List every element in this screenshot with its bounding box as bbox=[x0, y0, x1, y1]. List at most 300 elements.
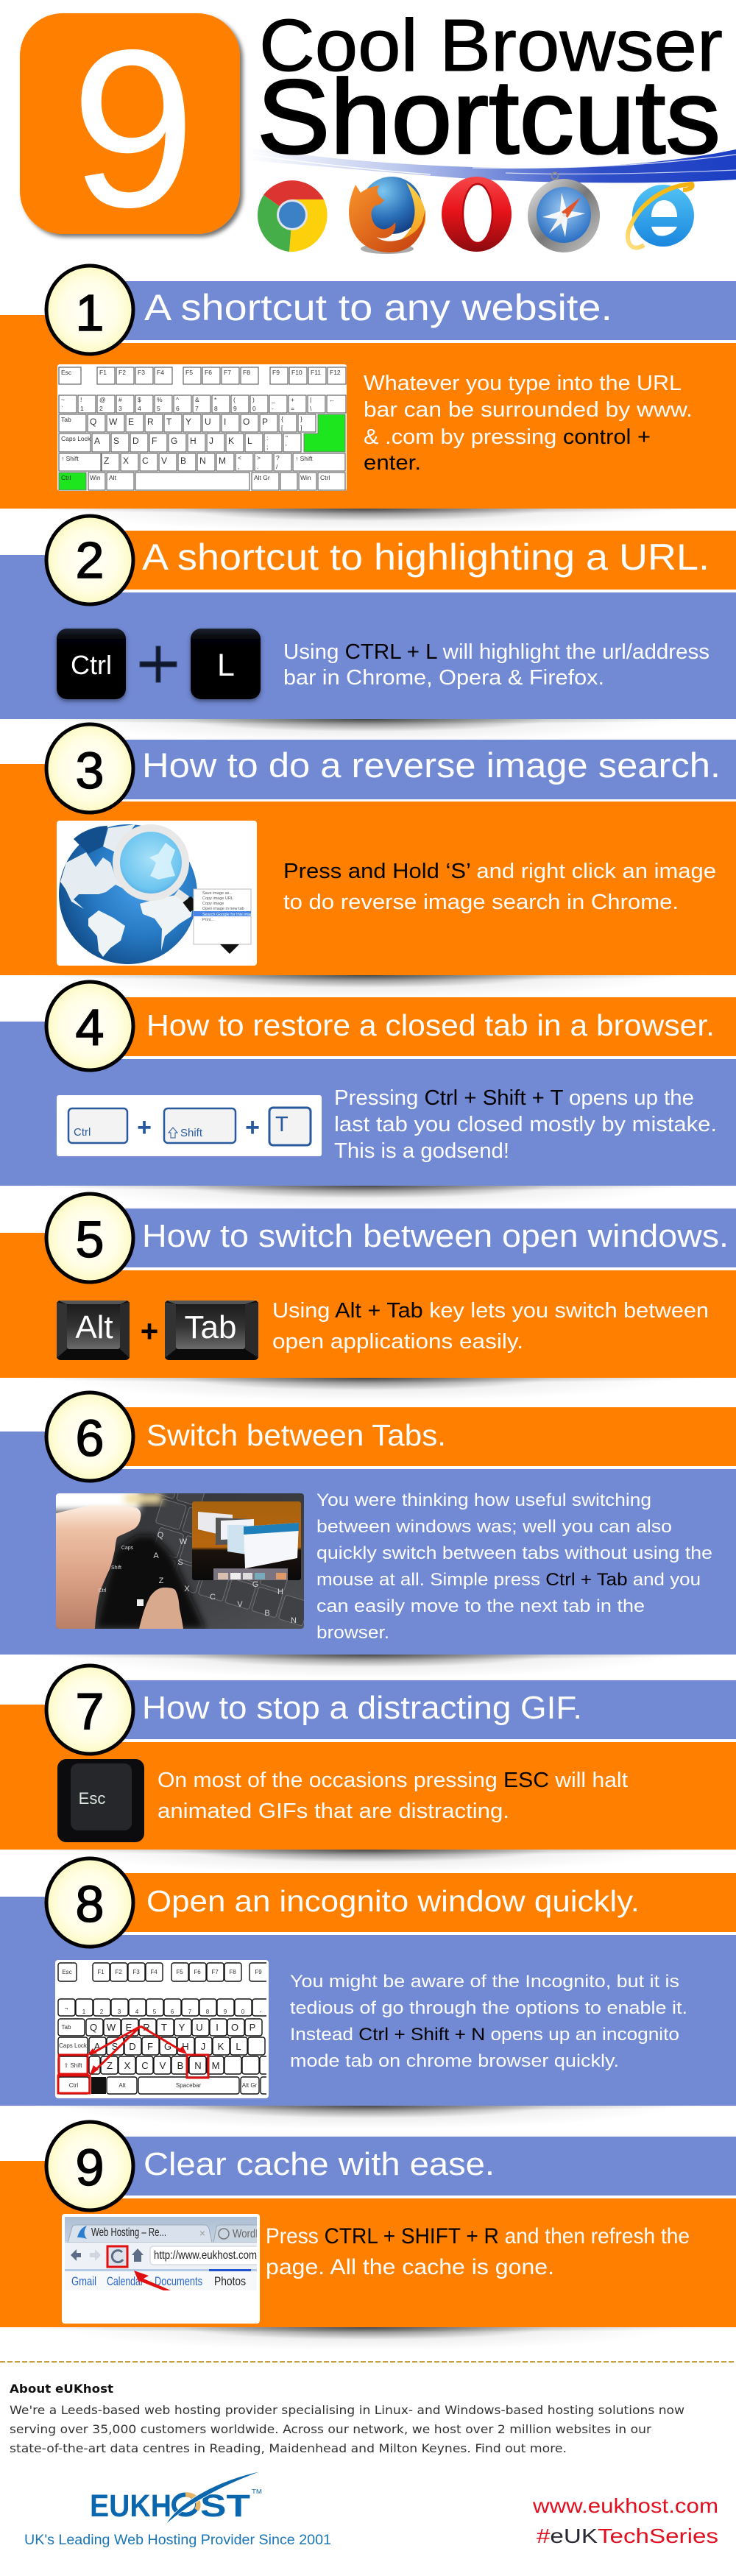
keyboard with red arrows to ctrl shift N: Esc bbox=[62, 1969, 72, 1975]
number badge 5 bbox=[46, 1194, 133, 1282]
keyboard with ctrl and enter highlighted: ← bbox=[329, 396, 336, 403]
keyboard with ctrl and enter highlighted: B bbox=[180, 456, 186, 466]
body text 5: open applications easily. bbox=[272, 1330, 523, 1354]
keyboard with red arrows to ctrl shift N: F8 bbox=[229, 1969, 236, 1975]
keyboard with red arrows to ctrl shift N: V bbox=[160, 2060, 166, 2071]
keyboard with ctrl and enter highlighted: 0 bbox=[252, 405, 256, 412]
photo: hand on keyboard with window switcher: N bbox=[291, 1616, 297, 1625]
body text 1: Whatever you type into the URL bbox=[364, 372, 682, 395]
keys: ctrl + L bbox=[57, 629, 261, 699]
number badge 4: 4 bbox=[76, 999, 104, 1056]
about heading: About eUKhost bbox=[10, 2382, 113, 2396]
keyboard with ctrl and enter highlighted: V bbox=[161, 456, 167, 466]
keyboard with ctrl and enter highlighted: " bbox=[286, 434, 288, 442]
keyboard with ctrl and enter highlighted: * bbox=[214, 396, 217, 403]
body text 6: between windows was; well you can also bbox=[316, 1517, 672, 1537]
body text 6 bbox=[316, 1490, 712, 1643]
photo: hand on keyboard with window switcher: W bbox=[180, 1538, 188, 1546]
keyboard with ctrl and enter highlighted: ] bbox=[300, 424, 302, 431]
shadow under panel 6 bbox=[22, 1631, 714, 1678]
keyboard with ctrl and enter highlighted: Ctrl bbox=[320, 474, 330, 481]
eUKhost logo: ST bbox=[200, 2488, 250, 2524]
keyboard with red arrows to ctrl shift N: Ctrl bbox=[69, 2082, 78, 2089]
number badge 5: 5 bbox=[76, 1211, 104, 1268]
keyboard with ctrl and enter highlighted: ↑ Shift bbox=[61, 455, 79, 462]
keyboard with ctrl and enter highlighted: 1 bbox=[80, 405, 84, 412]
keyboard with ctrl and enter highlighted: F10 bbox=[291, 369, 302, 376]
keyboard with ctrl and enter highlighted: S bbox=[113, 436, 119, 446]
shadow under panel 3 bbox=[22, 952, 714, 999]
number badge 7 bbox=[46, 1666, 133, 1754]
eUKhost logo: EUKH bbox=[90, 2488, 171, 2524]
keyboard with ctrl and enter highlighted: 8 bbox=[214, 405, 218, 412]
about paragraph bbox=[10, 2403, 684, 2455]
keyboard with ctrl and enter highlighted: % bbox=[157, 396, 163, 403]
keyboard with ctrl and enter highlighted: 6 bbox=[176, 405, 180, 412]
panel: shortcut 3 bbox=[0, 724, 736, 975]
keyboard with red arrows to ctrl shift N: Z bbox=[107, 2060, 113, 2071]
about paragraph: serving over 35,000 customers worldwide. Across our network, we host over 2 million websites in our bbox=[10, 2422, 651, 2436]
body text 6: You were thinking how useful switching bbox=[316, 1490, 651, 1510]
keyboard with ctrl and enter highlighted: Caps Lock bbox=[61, 435, 91, 442]
body text 8: Instead Ctrl + Shift + N opens up an incognito bbox=[290, 2025, 679, 2045]
keyboard with ctrl and enter highlighted: F6 bbox=[205, 369, 212, 376]
keyboard with red arrows to ctrl shift N: ⇧ Shift bbox=[64, 2062, 82, 2069]
panel: shortcut 4 bbox=[0, 982, 736, 1186]
website and hashtag: #eUK TechSeries bbox=[537, 2524, 718, 2547]
body text 6: quickly switch between tabs without using the bbox=[316, 1543, 712, 1563]
keyboard with ctrl and enter highlighted: ; bbox=[266, 443, 268, 450]
number badge 3 bbox=[46, 724, 133, 813]
keyboard with ctrl and enter highlighted: Alt Gr bbox=[254, 474, 270, 481]
photo: hand on keyboard with window switcher: Ctrl bbox=[99, 1588, 107, 1593]
keyboard with ctrl and enter highlighted: F9 bbox=[272, 369, 280, 376]
keyboard with red arrows to ctrl shift N: 3 bbox=[118, 2009, 121, 2015]
keyboard with ctrl and enter highlighted: { bbox=[281, 415, 283, 422]
keyboard with red arrows to ctrl shift N: Alt Gr bbox=[242, 2082, 258, 2089]
number badge 6: 6 bbox=[76, 1409, 104, 1467]
body text 8: tedious of go through the options to enable it. bbox=[290, 1998, 687, 2018]
photo: hand on keyboard with window switcher bbox=[56, 1493, 304, 1629]
body text 1: enter. bbox=[364, 451, 421, 475]
keyboard with ctrl and enter highlighted: ? bbox=[276, 454, 280, 461]
keyboard with ctrl and enter highlighted: 7 bbox=[195, 405, 199, 412]
keyboard with red arrows to ctrl shift N: 2 bbox=[100, 2009, 104, 2015]
keyboard with ctrl and enter highlighted: H bbox=[190, 436, 197, 446]
keyboard with ctrl and enter highlighted: \ bbox=[310, 405, 312, 412]
body text 8: mode tab on chrome browser quickly. bbox=[290, 2051, 619, 2071]
body text 7: On most of the occasions pressing ESC will halt bbox=[158, 1769, 628, 1792]
picture: globe, magnifier and context menu: Open image in new tab bbox=[202, 907, 244, 911]
header badge: big 9 bbox=[20, 3, 240, 254]
panel: shortcut 6 bbox=[0, 1393, 736, 1655]
keyboard with ctrl and enter highlighted: E bbox=[128, 417, 134, 427]
keyboard with ctrl and enter highlighted: Z bbox=[104, 456, 109, 466]
keyboard with red arrows to ctrl shift N: 6 bbox=[171, 2009, 174, 2015]
heading 7: How to stop a distracting GIF. bbox=[142, 1690, 582, 1726]
decorative blue swoosh bbox=[247, 147, 736, 183]
keyboard with ctrl and enter highlighted: ) bbox=[252, 396, 255, 403]
picture: globe, magnifier and context menu: Copy image bbox=[202, 902, 224, 906]
keyboard with ctrl and enter highlighted: Win bbox=[90, 474, 101, 481]
keyboard with ctrl and enter highlighted: F8 bbox=[243, 369, 250, 376]
keyboard with ctrl and enter highlighted: F bbox=[152, 436, 157, 446]
keyboard with red arrows to ctrl shift N: F4 bbox=[150, 1969, 158, 1975]
keyboard with ctrl and enter highlighted: L bbox=[247, 436, 252, 446]
keyboard with ctrl and enter highlighted: Win bbox=[300, 474, 311, 481]
photo: hand on keyboard with window switcher: Caps bbox=[121, 1546, 134, 1551]
screenshot: browser reload button: http://www.eukhost.com bbox=[154, 2249, 257, 2262]
keyboard with red arrows to ctrl shift N: 7 bbox=[188, 2009, 192, 2015]
eUKhost logo bbox=[90, 2471, 263, 2524]
keyboard with ctrl and enter highlighted: F5 bbox=[185, 369, 193, 376]
photo: hand on keyboard with window switcher: X bbox=[184, 1585, 190, 1593]
keyboard with ctrl and enter highlighted: . bbox=[257, 463, 258, 470]
keyboard with red arrows to ctrl shift N: A bbox=[94, 2041, 101, 2052]
shadow under panel 2 bbox=[22, 696, 714, 743]
keys: alt + tab: + bbox=[141, 1314, 158, 1348]
body text 9: Press CTRL + SHIFT + R and then refresh the bbox=[266, 2224, 690, 2248]
screenshot: browser reload button: × bbox=[199, 2227, 205, 2239]
number badge 2 bbox=[46, 516, 133, 604]
keyboard with red arrows to ctrl shift N: 4 bbox=[135, 2009, 139, 2015]
keys: alt + tab: Alt bbox=[75, 1309, 113, 1345]
keyboard with ctrl and enter highlighted: ~ bbox=[61, 396, 65, 403]
photo: hand on keyboard with window switcher: Shift bbox=[111, 1565, 121, 1571]
keyboard with red arrows to ctrl shift N: X bbox=[124, 2060, 131, 2071]
keyboard with red arrows to ctrl shift N: 1 bbox=[82, 2009, 86, 2015]
keyboard with ctrl and enter highlighted: T bbox=[166, 417, 172, 427]
photo: hand on keyboard with window switcher: B bbox=[264, 1609, 270, 1618]
keyboard with ctrl and enter highlighted: A bbox=[94, 436, 100, 446]
keyboard with ctrl and enter highlighted: C bbox=[142, 456, 149, 466]
body text 4 bbox=[334, 1086, 717, 1163]
keyboard with red arrows to ctrl shift N: R bbox=[143, 2022, 150, 2033]
keyboard with ctrl and enter highlighted: W bbox=[109, 417, 118, 427]
keyboard with red arrows to ctrl shift N: B bbox=[177, 2060, 183, 2071]
keys: ctrl + shift + T: + bbox=[245, 1114, 260, 1142]
keyboard with ctrl and enter highlighted: O bbox=[243, 417, 250, 427]
body text 7: animated GIFs that are distracting. bbox=[158, 1800, 509, 1823]
photo: hand on keyboard with window switcher: V bbox=[237, 1600, 243, 1609]
keyboard with ctrl and enter highlighted: N bbox=[199, 456, 206, 466]
about paragraph: We're a Leeds-based web hosting provider specialising in Linux- and Windows-based hosting solutions now bbox=[10, 2403, 684, 2417]
keyboard with red arrows to ctrl shift N: - bbox=[260, 2009, 262, 2015]
keyboard with ctrl and enter highlighted: F4 bbox=[157, 369, 164, 376]
keyboard with red arrows to ctrl shift N: J bbox=[201, 2041, 205, 2052]
photo: hand on keyboard with window switcher: S bbox=[177, 1558, 183, 1567]
shadow under panel 4 bbox=[22, 1162, 714, 1209]
keyboard with red arrows to ctrl shift N: F9 bbox=[255, 1969, 262, 1975]
body text 1: bar can be surrounded by www. bbox=[364, 398, 693, 422]
title: Cool Browser bbox=[259, 4, 723, 87]
number badge 8: 8 bbox=[76, 1875, 104, 1933]
keyboard with red arrows to ctrl shift N: F2 bbox=[115, 1969, 122, 1975]
keyboard with ctrl and enter highlighted: Q bbox=[90, 417, 96, 427]
screenshot: browser reload button: Calendar bbox=[107, 2274, 144, 2288]
keyboard with ctrl and enter highlighted: J bbox=[209, 436, 213, 446]
shadow under panel 8 bbox=[22, 2082, 714, 2129]
body text 5 bbox=[272, 1299, 709, 1354]
keyboard with ctrl and enter highlighted: ( bbox=[233, 396, 236, 403]
keyboard with red arrows to ctrl shift N: ¬ bbox=[65, 2005, 68, 2011]
keyboard with red arrows to ctrl shift N: O bbox=[231, 2022, 238, 2033]
keyboard with red arrows to ctrl shift N: H bbox=[182, 2041, 189, 2052]
keyboard with red arrows to ctrl shift N: N bbox=[194, 2060, 202, 2071]
title bbox=[257, 4, 723, 176]
screenshot: browser reload button: Photos bbox=[214, 2274, 246, 2288]
keys: ctrl + L: Ctrl bbox=[71, 650, 112, 680]
panel: shortcut 7 bbox=[0, 1666, 736, 1850]
screenshot: browser reload button: Gmail bbox=[71, 2274, 96, 2288]
photo: hand on keyboard with window switcher: Z bbox=[159, 1577, 164, 1585]
photo: hand on keyboard with window switcher: H bbox=[277, 1588, 283, 1596]
keyboard with ctrl and enter highlighted: $ bbox=[138, 396, 141, 403]
shadow under panel 7 bbox=[22, 1826, 714, 1873]
keyboard with red arrows to ctrl shift N: Alt bbox=[118, 2082, 126, 2089]
keyboard with ctrl and enter highlighted: D bbox=[132, 436, 139, 446]
body text 4: last tab you closed mostly by mistake. bbox=[334, 1113, 717, 1136]
keyboard with red arrows to ctrl shift N: W bbox=[107, 2022, 116, 2033]
keyboard with red arrows to ctrl shift N: 0 bbox=[241, 2009, 245, 2015]
body text 6: can easily move to the next tab in the bbox=[316, 1596, 645, 1616]
body text 1 bbox=[364, 372, 693, 475]
keyboard with ctrl and enter highlighted: Alt bbox=[109, 474, 117, 481]
about paragraph: state-of-the-art data centres in Reading, Maidenhead and Milton Keynes. Find out more. bbox=[10, 2441, 567, 2455]
panel: shortcut 9 bbox=[0, 2122, 736, 2327]
heading 6: Switch between Tabs. bbox=[146, 1418, 446, 1452]
body text 8 bbox=[290, 1972, 687, 2071]
shadow under panel 5 bbox=[22, 1354, 714, 1401]
keyboard with ctrl and enter highlighted: F11 bbox=[311, 369, 321, 376]
heading 8: Open an incognito window quickly. bbox=[146, 1884, 640, 1918]
website and hashtag bbox=[532, 2494, 718, 2547]
keyboard with red arrows to ctrl shift N: U bbox=[196, 2022, 203, 2033]
keyboard with red arrows to ctrl shift N: D bbox=[129, 2041, 136, 2052]
eUKhost logo: TM bbox=[252, 2488, 262, 2495]
keyboard with ctrl and enter highlighted: U bbox=[205, 417, 211, 427]
body text 3: Press and Hold ‘S’ and right click an image bbox=[283, 860, 716, 883]
keyboard with ctrl and enter highlighted: # bbox=[118, 396, 122, 403]
keyboard with ctrl and enter highlighted: , bbox=[238, 463, 239, 470]
photo: hand on keyboard with window switcher: C bbox=[210, 1593, 216, 1602]
keyboard with ctrl and enter highlighted: ` bbox=[61, 405, 63, 412]
keyboard with red arrows to ctrl shift N: S bbox=[112, 2041, 118, 2052]
keyboard with ctrl and enter highlighted: @ bbox=[99, 396, 106, 403]
keyboard with ctrl and enter highlighted: Esc bbox=[61, 369, 72, 376]
header badge: big 9: 9 bbox=[71, 3, 196, 254]
keyboard with ctrl and enter highlighted: [ bbox=[281, 424, 283, 431]
keyboard with red arrows to ctrl shift N: F7 bbox=[211, 1969, 219, 1975]
keyboard with red arrows to ctrl shift N: L bbox=[236, 2041, 241, 2052]
heading 4: How to restore a closed tab in a browser. bbox=[146, 1008, 715, 1042]
number badge 3: 3 bbox=[76, 742, 104, 799]
icon: opera bbox=[442, 177, 512, 252]
keyboard with ctrl and enter highlighted: G bbox=[171, 436, 177, 446]
panel: shortcut 5 bbox=[0, 1194, 736, 1378]
keyboard with ctrl and enter highlighted: & bbox=[195, 396, 199, 403]
keys: ctrl + shift + T bbox=[57, 1095, 322, 1156]
keyboard with red arrows to ctrl shift N: I bbox=[216, 2022, 219, 2033]
keyboard with ctrl and enter highlighted: 4 bbox=[138, 405, 141, 412]
number badge 2: 2 bbox=[76, 531, 104, 589]
keyboard with ctrl and enter highlighted: : bbox=[266, 434, 268, 442]
keyboard with ctrl and enter highlighted: 5 bbox=[157, 405, 160, 412]
keyboard with ctrl and enter highlighted: } bbox=[300, 415, 302, 422]
keyboard with red arrows to ctrl shift N: T bbox=[161, 2022, 167, 2033]
keyboard with red arrows to ctrl shift N: F6 bbox=[194, 1969, 201, 1975]
keyboard with red arrows to ctrl shift N bbox=[55, 1960, 277, 2098]
keys: alt + tab bbox=[57, 1301, 258, 1360]
body text 5: Using Alt + Tab key lets you switch between bbox=[272, 1299, 709, 1323]
body text 9 bbox=[266, 2224, 690, 2279]
screenshot: browser reload button: WordP bbox=[233, 2228, 262, 2240]
keyboard with red arrows to ctrl shift N: 9 bbox=[224, 2009, 227, 2015]
keyboard with ctrl and enter highlighted: ! bbox=[80, 396, 82, 403]
picture: globe, magnifier and context menu: Print... bbox=[202, 918, 214, 922]
heading 3: How to do a reverse image search. bbox=[142, 746, 721, 785]
picture: globe, magnifier and context menu: Copy image URL bbox=[202, 896, 233, 901]
body text 4: Pressing Ctrl + Shift + T opens up the bbox=[334, 1086, 694, 1110]
keyboard with ctrl and enter highlighted: ↑ Shift bbox=[295, 455, 313, 462]
number badge 6 bbox=[46, 1393, 133, 1481]
icon: internet explorer bbox=[628, 184, 694, 248]
screenshot: browser reload button: Documents bbox=[155, 2274, 202, 2288]
screenshot: browser reload button: Web Hosting – Re... bbox=[91, 2226, 166, 2239]
heading 1: A shortcut to any website. bbox=[144, 287, 612, 328]
keyboard with ctrl and enter highlighted: < bbox=[238, 454, 241, 461]
photo: hand on keyboard with window switcher: G bbox=[252, 1580, 258, 1589]
keyboard with ctrl and enter highlighted bbox=[57, 364, 347, 491]
keyboard with ctrl and enter highlighted: F3 bbox=[138, 369, 145, 376]
body text 9: page. All the cache is gone. bbox=[266, 2255, 554, 2279]
keyboard with red arrows to ctrl shift N: K bbox=[218, 2041, 224, 2052]
keyboard with ctrl and enter highlighted: F1 bbox=[99, 369, 107, 376]
browser icons bbox=[258, 172, 694, 254]
heading 9: Clear cache with ease. bbox=[144, 2146, 495, 2182]
heading 2: A shortcut to highlighting a URL. bbox=[142, 537, 710, 578]
body text 2: Using CTRL + L will highlight the url/address bbox=[283, 640, 710, 664]
keyboard with red arrows to ctrl shift N: C bbox=[141, 2060, 149, 2071]
body text 1: & .com by pressing control + bbox=[364, 425, 651, 449]
key: esc: Esc bbox=[79, 1789, 105, 1808]
heading 5: How to switch between open windows. bbox=[142, 1218, 729, 1254]
number badge 7: 7 bbox=[76, 1682, 104, 1740]
keyboard with red arrows to ctrl shift N: P bbox=[250, 2022, 255, 2033]
icon: chrome bbox=[258, 180, 328, 252]
keys: ctrl + shift + T: Ctrl bbox=[74, 1126, 91, 1139]
keys: ctrl + L: L bbox=[217, 648, 235, 683]
body text 8: You might be aware of the Incognito, but it is bbox=[290, 1972, 679, 1992]
title: Shortcuts bbox=[257, 59, 721, 176]
picture: globe, magnifier and context menu: Search Google for this image bbox=[202, 913, 255, 917]
keyboard with red arrows to ctrl shift N: 5 bbox=[153, 2009, 157, 2015]
keyboard with red arrows to ctrl shift N: E bbox=[126, 2022, 132, 2033]
keyboard with ctrl and enter highlighted: R bbox=[147, 417, 154, 427]
keys: ctrl + shift + T: + bbox=[137, 1114, 152, 1142]
body text 2 bbox=[283, 640, 710, 690]
keyboard with red arrows to ctrl shift N: Tab bbox=[62, 2024, 71, 2031]
website and hashtag: www.eukhost.com bbox=[532, 2494, 718, 2517]
number badge 9 bbox=[46, 2122, 133, 2210]
shadow under panel 9 bbox=[22, 2304, 714, 2351]
number badge 9: 9 bbox=[76, 2139, 104, 2196]
keyboard with ctrl and enter highlighted: - bbox=[272, 405, 274, 412]
keyboard with ctrl and enter highlighted: M bbox=[219, 456, 226, 466]
keyboard with ctrl and enter highlighted: _ bbox=[271, 396, 275, 403]
keyboard with ctrl and enter highlighted: ' bbox=[286, 443, 287, 450]
photo: hand on keyboard with window switcher: A bbox=[153, 1551, 159, 1560]
keyboard with ctrl and enter highlighted: Ctrl bbox=[61, 474, 71, 481]
picture: globe, magnifier and context menu: Save image as... bbox=[202, 891, 233, 896]
shadow under panel 1 bbox=[22, 485, 714, 532]
body text 3: to do reverse image search in Chrome. bbox=[283, 891, 679, 914]
keyboard with ctrl and enter highlighted: K bbox=[228, 436, 234, 446]
icon: safari bbox=[528, 172, 600, 252]
keyboard with red arrows to ctrl shift N: F1 bbox=[97, 1969, 105, 1975]
keyboard with ctrl and enter highlighted: Y bbox=[185, 417, 191, 427]
keyboard with red arrows to ctrl shift N: Y bbox=[179, 2022, 185, 2033]
logo tagline: UK's Leading Web Hosting Provider Since 2001 bbox=[24, 2532, 331, 2548]
screenshot: browser reload button bbox=[62, 2214, 268, 2324]
keyboard with ctrl and enter highlighted: X bbox=[123, 456, 129, 466]
key: esc bbox=[57, 1759, 144, 1842]
panel: shortcut 2 bbox=[0, 516, 736, 719]
body text 2: bar in Chrome, Opera & Firefox. bbox=[283, 666, 604, 690]
keyboard with red arrows to ctrl shift N: G bbox=[164, 2041, 171, 2052]
keyboard with ctrl and enter highlighted: = bbox=[291, 405, 294, 412]
keyboard with ctrl and enter highlighted: ^ bbox=[176, 396, 179, 403]
keyboard with red arrows to ctrl shift N: Q bbox=[90, 2022, 97, 2033]
enter key highlight bbox=[304, 414, 345, 452]
keys: ctrl + shift + T: Shift bbox=[180, 1127, 203, 1139]
number badge 1: 1 bbox=[76, 284, 104, 342]
keyboard with red arrows to ctrl shift N: F3 bbox=[132, 1969, 140, 1975]
body text 6: browser. bbox=[316, 1623, 389, 1643]
keyboard with red arrows to ctrl shift N: M bbox=[212, 2060, 219, 2071]
keyboard with ctrl and enter highlighted: I bbox=[224, 417, 226, 427]
keyboard with ctrl and enter highlighted: | bbox=[310, 396, 311, 403]
panel: shortcut 8 bbox=[0, 1858, 736, 2106]
keys: alt + tab: Tab bbox=[185, 1309, 236, 1345]
keyboard with ctrl and enter highlighted: 3 bbox=[118, 405, 122, 412]
photo: hand on keyboard with window switcher: Q bbox=[158, 1531, 164, 1540]
keyboard with ctrl and enter highlighted: F12 bbox=[330, 369, 341, 376]
number badge 4 bbox=[46, 982, 133, 1070]
number badge 1 bbox=[46, 266, 133, 354]
keyboard with ctrl and enter highlighted: + bbox=[291, 396, 294, 403]
panel: shortcut 1 bbox=[0, 266, 736, 509]
keyboard with red arrows to ctrl shift N: Spacebar bbox=[176, 2082, 201, 2089]
body text 4: This is a godsend! bbox=[334, 1139, 509, 1163]
keyboard with ctrl and enter highlighted: F7 bbox=[224, 369, 231, 376]
body text 6: mouse at all. Simple press Ctrl + Tab and you bbox=[316, 1570, 701, 1590]
keyboard with ctrl and enter highlighted: 9 bbox=[233, 405, 237, 412]
keyboard with red arrows to ctrl shift N: F5 bbox=[176, 1969, 183, 1975]
keyboard with ctrl and enter highlighted: > bbox=[257, 454, 261, 461]
number badge 8 bbox=[46, 1858, 133, 1947]
keyboard with red arrows to ctrl shift N: 8 bbox=[206, 2009, 210, 2015]
picture: globe, magnifier and context menu bbox=[57, 821, 257, 966]
keys: ctrl + shift + T: T bbox=[275, 1113, 289, 1136]
keyboard with ctrl and enter highlighted: Tab bbox=[61, 416, 71, 423]
keyboard with ctrl and enter highlighted: 2 bbox=[99, 405, 103, 412]
icon: firefox bbox=[349, 177, 425, 254]
keyboard with red arrows to ctrl shift N: Caps Lock bbox=[59, 2042, 88, 2049]
keyboard with ctrl and enter highlighted: P bbox=[262, 417, 268, 427]
keyboard with ctrl and enter highlighted: / bbox=[276, 463, 278, 470]
body text 7 bbox=[158, 1769, 628, 1823]
